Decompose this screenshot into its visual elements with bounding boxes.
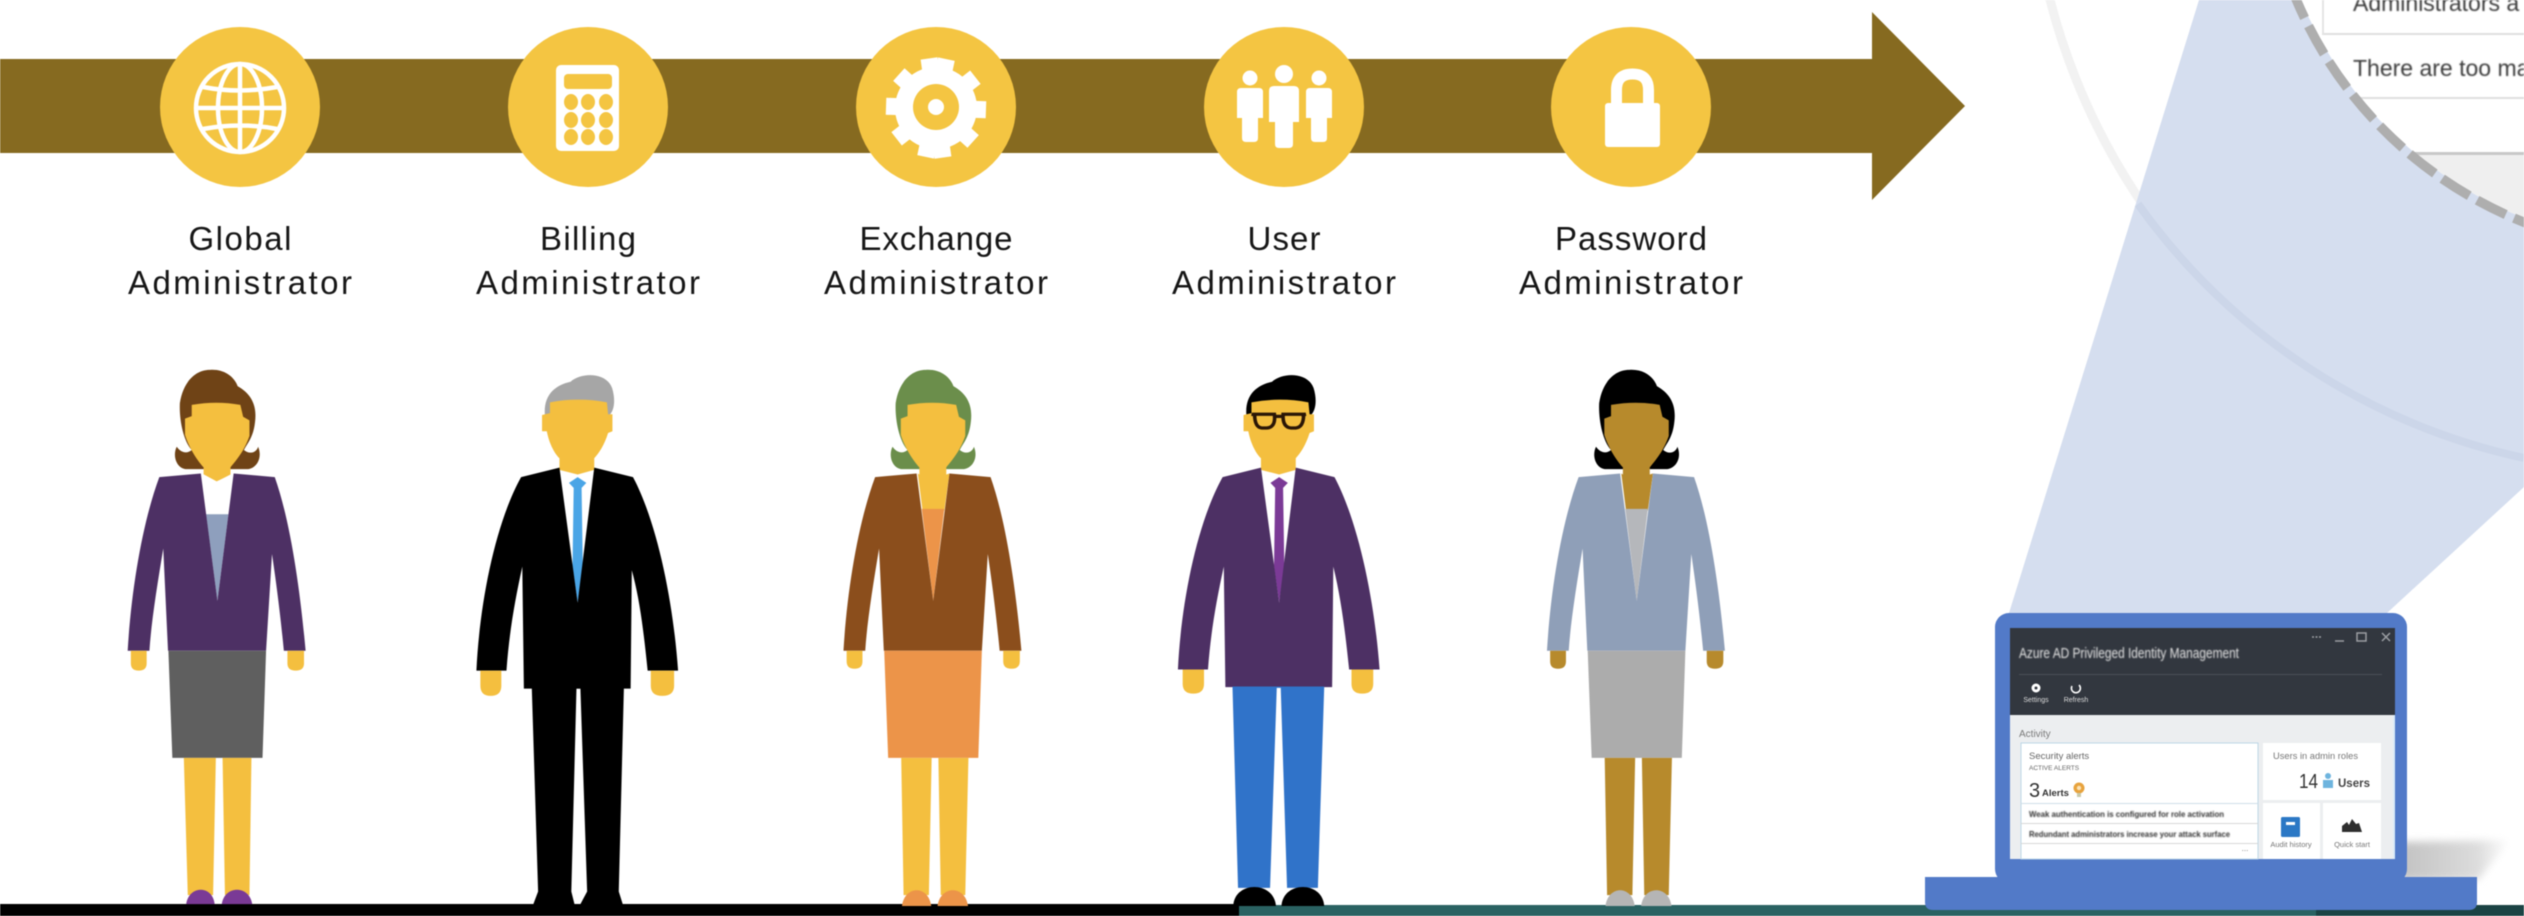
toolbar: settings: Settings — [2023, 697, 2049, 704]
figure: password administrator woman — [1547, 370, 1725, 906]
label: Exchange Administrator: Administrator — [824, 264, 1048, 301]
toolbar: settings — [2023, 684, 2049, 704]
icon: user — [2323, 773, 2333, 788]
icon: globe — [160, 27, 320, 187]
window title: Azure AD Privileged Identity Management — [2019, 646, 2239, 662]
laptop shadow — [2400, 840, 2510, 880]
security alerts card: ... — [2242, 844, 2248, 853]
security alerts card: Redundant administrators increase your attack surface — [2029, 829, 2230, 839]
label: Exchange Administrator: Exchange — [860, 220, 1012, 257]
activity heading: Activity — [2019, 729, 2051, 740]
users in admin roles card: Users — [2338, 778, 2370, 790]
outer thin ring — [2030, 0, 2524, 485]
users in admin roles card: 14 — [2299, 771, 2318, 793]
light blue beam — [2009, 0, 2524, 613]
label: Password Administrator: Password — [1555, 220, 1707, 257]
audit history tile — [2263, 803, 2320, 859]
icon: gear — [856, 27, 1016, 187]
label: Billing Administrator — [476, 220, 700, 301]
security alerts card: Weak authentication is configured for role activation — [2029, 809, 2224, 819]
figure: exchange administrator woman — [843, 370, 1021, 906]
toolbar: refresh — [2064, 685, 2088, 704]
label: User Administrator: Administrator — [1172, 264, 1396, 301]
icon: people — [1204, 27, 1364, 187]
users in admin roles card: Users in admin roles — [2273, 751, 2359, 761]
figure: user administrator man — [1178, 375, 1380, 906]
security alerts card — [2021, 743, 2258, 859]
laptop body — [1995, 613, 2407, 883]
figure: global administrator woman — [128, 370, 306, 904]
users in admin roles card — [2263, 743, 2381, 800]
background beam and spotlight — [2009, 0, 2524, 613]
glasses — [1251, 414, 1306, 428]
label: User Administrator: User — [1248, 220, 1320, 257]
screen — [2010, 628, 2395, 859]
icon: padlock — [1551, 27, 1711, 187]
label: Password Administrator: Administrator — [1519, 264, 1743, 301]
security alerts card: Security alerts — [2029, 751, 2089, 762]
label: Billing Administrator: Administrator — [476, 264, 700, 301]
dashed circle outline — [2264, 0, 2524, 251]
quick start tile — [2323, 803, 2381, 859]
label: Global Administrator — [128, 220, 352, 301]
laptop base — [1925, 877, 2477, 910]
table rows — [2322, 0, 2524, 216]
window header — [2010, 628, 2395, 715]
laptop with Privileged Identity Management dashboard — [1925, 613, 2477, 910]
label: User Administrator — [1172, 220, 1396, 301]
window controls — [2312, 633, 2390, 641]
audit history tile: Audit history — [2270, 840, 2312, 849]
security alerts card: ACTIVE ALERTS — [2029, 765, 2080, 772]
security alerts card: Alerts — [2042, 788, 2069, 799]
label: Billing Administrator: Billing — [540, 220, 636, 257]
bottom ground bar — [0, 904, 2524, 916]
toolbar: refresh: Refresh — [2064, 697, 2088, 704]
figure: billing administrator man — [476, 375, 678, 904]
timeline arrow — [0, 12, 1965, 200]
label: Password Administrator — [1519, 220, 1743, 301]
security alerts card: 3 — [2029, 780, 2040, 802]
panel circle fill — [2268, 0, 2524, 247]
icon: alert bulb — [2074, 782, 2084, 797]
magnified alerts panel — [2291, 0, 2524, 228]
ring seen through beam — [2138, 204, 2524, 458]
label: Exchange Administrator — [824, 220, 1048, 301]
icon: calculator — [508, 27, 668, 187]
quick start tile: Quick start — [2334, 840, 2371, 849]
label: Global Administrator: Administrator — [128, 264, 352, 301]
label: Global Administrator: Global — [188, 220, 292, 257]
